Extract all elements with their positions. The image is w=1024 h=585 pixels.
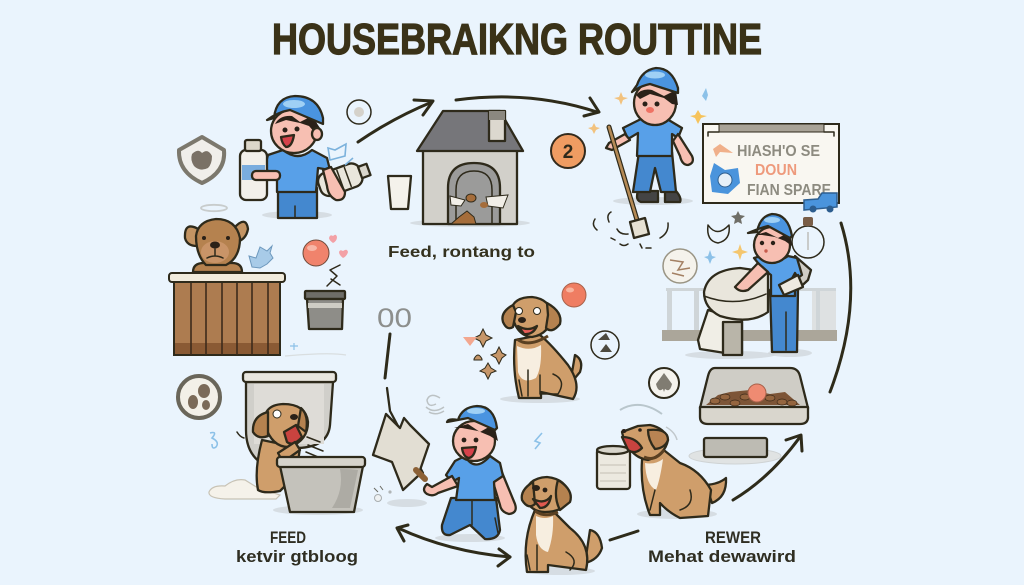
mark: motion arc bbox=[620, 405, 662, 414]
bottle on right bbox=[316, 158, 373, 199]
sign text: HIASH'O SE bbox=[737, 143, 820, 160]
wooden crate bbox=[169, 273, 285, 355]
arrow: right side curve bbox=[830, 223, 851, 392]
sparkles: around mop person bbox=[588, 88, 708, 134]
kennel house bbox=[410, 111, 530, 227]
icon: shield badge bbox=[179, 137, 224, 183]
icon: heart circle bbox=[649, 368, 679, 398]
fluffy dog on crate bbox=[185, 205, 248, 272]
small tray bbox=[689, 438, 781, 464]
sign board: DOUN bbox=[755, 162, 797, 179]
sparkles left of central dog bbox=[463, 329, 506, 379]
title: HOUSEBRAIKNG ROUTTINE bbox=[272, 15, 762, 64]
icon: cup bbox=[388, 176, 411, 209]
arrow: lower right bbox=[733, 435, 802, 500]
dog eating bbox=[622, 425, 726, 519]
arrow: kennel to mop bbox=[456, 97, 599, 116]
marks: mop debris bbox=[593, 212, 668, 248]
step number badge: 2 bbox=[563, 142, 573, 163]
person with mop bbox=[606, 68, 693, 238]
trash pot bbox=[305, 265, 345, 329]
step number badge bbox=[551, 134, 585, 168]
arrow: person to kennel bbox=[358, 100, 433, 142]
caption: feed ketvir: ketvir gtbloog bbox=[236, 547, 358, 566]
mark: swirl bbox=[426, 395, 444, 414]
icon: paw badge bbox=[178, 376, 220, 418]
icon: star bbox=[731, 211, 745, 224]
arrow: short dash between dogs bbox=[610, 531, 638, 540]
kneeling person with broom bbox=[373, 388, 516, 542]
caption: feed: Feed, rontang to bbox=[388, 244, 535, 261]
caption: rewer: Mehat dewawird bbox=[648, 547, 796, 566]
caption: feed ketvir: FEED bbox=[270, 528, 306, 547]
icon: ball bbox=[562, 283, 586, 307]
railing behind toilet bbox=[666, 288, 836, 330]
icon: blue splash bbox=[249, 246, 273, 268]
icon: crescent bbox=[708, 225, 729, 243]
icon: coral ball bbox=[303, 235, 348, 266]
lower sitting dog bbox=[522, 477, 602, 575]
toilet with person bbox=[685, 214, 812, 359]
caption: rewer bbox=[648, 528, 796, 566]
icon: recycling mark bbox=[591, 331, 619, 359]
icon: cloud puff bbox=[347, 100, 371, 124]
marks: small plus and floor line bbox=[285, 343, 346, 356]
arrow: left vertical dash bbox=[385, 334, 390, 378]
arrow: double headed bbox=[397, 525, 510, 566]
marks: small dots near broom bbox=[374, 486, 392, 502]
caption: rewer: REWER bbox=[705, 528, 761, 547]
sparkles near toilet bbox=[704, 244, 748, 264]
sign board: FIAN SPARE bbox=[747, 182, 831, 199]
mark: blue squiggle bbox=[210, 433, 217, 448]
caption: feed ketvir bbox=[236, 528, 358, 566]
bottle on left bbox=[240, 140, 267, 200]
marks: double zero: 00 bbox=[377, 303, 412, 333]
litter tray with kibble bbox=[700, 368, 810, 425]
icon: light bulb bbox=[792, 217, 824, 258]
person with bottles bbox=[240, 96, 373, 219]
mark: blue squiggle right bbox=[535, 433, 542, 449]
sign board bbox=[703, 124, 839, 212]
central sitting dog bbox=[500, 297, 581, 403]
toilet with dog and pot bbox=[209, 372, 365, 515]
tin can bbox=[597, 446, 630, 489]
marks: sparkle and splash bbox=[328, 144, 353, 165]
icon: cracked circle bbox=[663, 249, 697, 283]
